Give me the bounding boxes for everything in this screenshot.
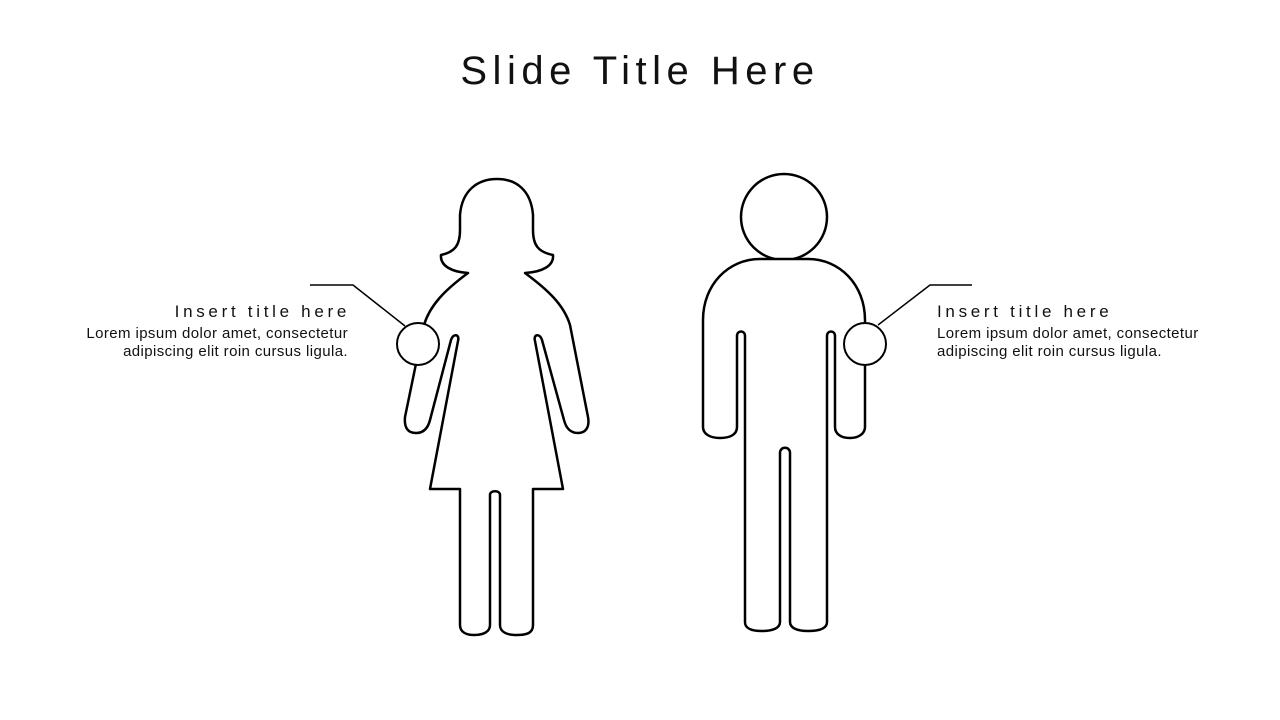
callout: left connector	[310, 285, 405, 326]
icon: woman	[405, 179, 588, 635]
text block: left: Lorem ipsum dolor amet, consectetur	[86, 325, 348, 342]
callout circle: right	[844, 323, 886, 365]
text block: right: adipiscing elit roin cursus ligula.	[937, 343, 1162, 360]
text block: right: Lorem ipsum dolor amet, consectetur	[937, 325, 1199, 342]
text block: left	[86, 302, 350, 360]
text block: left: adipiscing elit roin cursus ligula.	[123, 343, 348, 360]
text block: right: Insert title here	[937, 302, 1112, 321]
callout circle: left	[397, 323, 439, 365]
icon: man	[703, 174, 865, 631]
text block: right	[937, 302, 1199, 360]
callout: right connector	[878, 285, 972, 325]
text block: left: Insert title here	[175, 302, 350, 321]
title: Slide Title Here	[460, 49, 820, 93]
